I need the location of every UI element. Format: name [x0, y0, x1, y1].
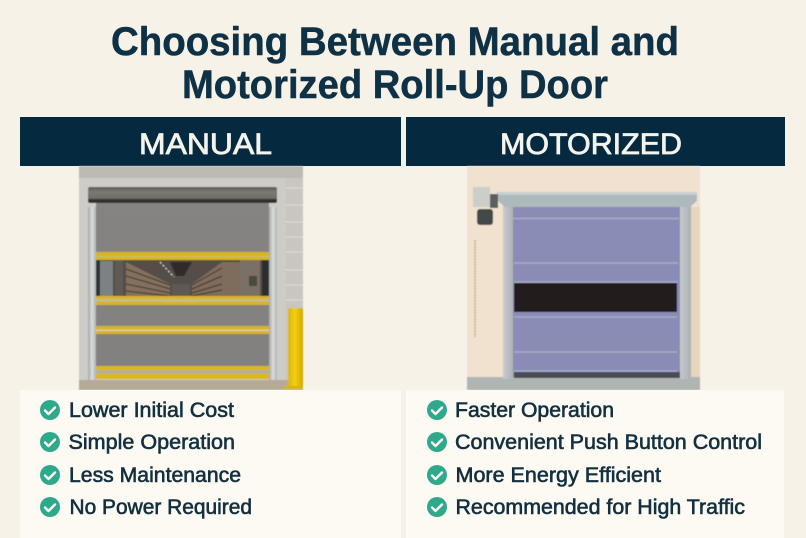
- benefit: less maintenance: Less Maintenance: [69, 464, 241, 487]
- panel: motorized benefits: [406, 390, 784, 538]
- panel: manual header: [20, 117, 401, 166]
- benefit: energy efficient: More Energy Efficient: [456, 464, 661, 487]
- warehouse window: [96, 260, 269, 296]
- benefit: no power required: No Power Required: [70, 496, 252, 519]
- panel: motorized header: [406, 117, 785, 166]
- image: manual roll-up door: [79, 166, 303, 390]
- title: Motorized Roll-Up Door: [182, 63, 608, 107]
- chain: [474, 240, 476, 337]
- panel: manual header: MANUAL: [139, 128, 272, 161]
- title: [111, 20, 679, 107]
- benefit: faster operation: Faster Operation: [455, 399, 614, 422]
- panel: manual benefits: [20, 390, 401, 538]
- panel: motorized header: MOTORIZED: [500, 128, 682, 161]
- yellow bollard: [284, 308, 303, 389]
- title: Choosing Between Manual and: [111, 20, 679, 64]
- benefit: simple operation: Simple Operation: [68, 431, 235, 454]
- benefit: high traffic: Recommended for High Traffic: [456, 496, 745, 519]
- motor unit: [473, 187, 498, 225]
- benefit: push button control: Convenient Push Button Control: [455, 431, 762, 454]
- image: motorized roll-up door: [467, 166, 700, 390]
- benefit: lower initial cost: Lower Initial Cost: [69, 399, 234, 422]
